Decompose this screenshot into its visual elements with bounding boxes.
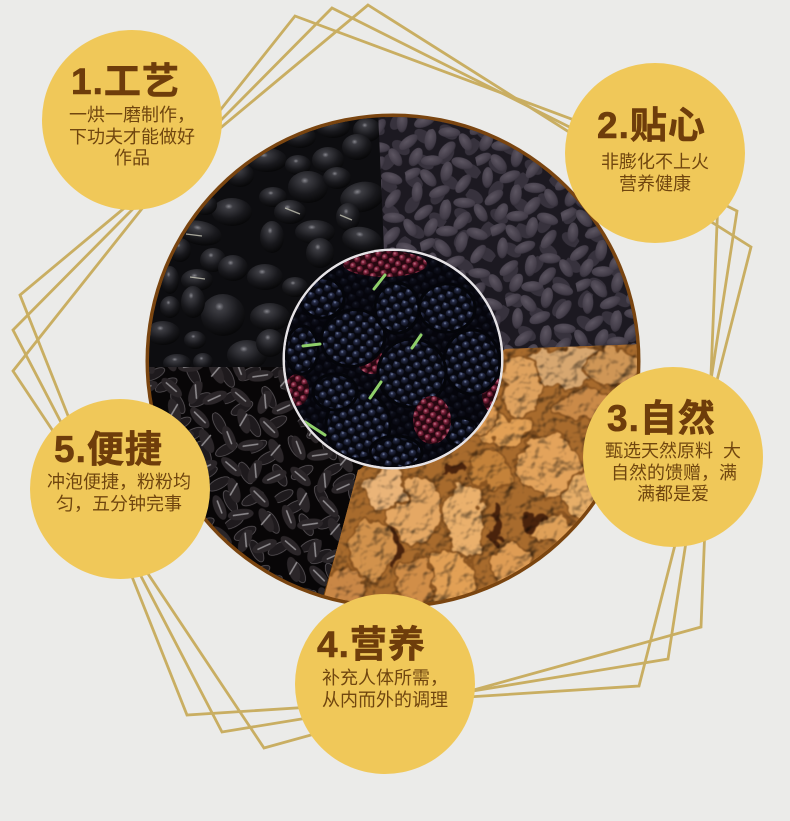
red unripe berries behind	[285, 251, 506, 413]
body text 4: 补充人体所需，	[322, 668, 448, 688]
body text 2: 非膨化不上火	[601, 152, 709, 172]
circle 1: craft	[42, 30, 222, 210]
red berry in front	[413, 396, 451, 444]
central photo circle	[145, 110, 660, 630]
body text 1: 一烘一磨制作，	[69, 105, 195, 125]
body text 5	[47, 472, 191, 514]
circle 5: convenience	[30, 399, 210, 579]
heading 4: 4.营养	[317, 624, 426, 665]
body text 3: 甄选天然原料 大	[605, 441, 741, 461]
heading 5: 5.便捷	[54, 429, 163, 470]
body text 3: 自然的馈赠，满	[611, 463, 737, 483]
body text 1: 下功夫才能做好	[69, 127, 195, 147]
heading 2: 2.贴心	[597, 105, 706, 146]
body text 2	[601, 152, 709, 194]
body text 5: 匀，五分钟完事	[56, 494, 182, 514]
body text 4	[322, 668, 448, 710]
body text 1: 作品	[114, 148, 150, 168]
heading 3: 3.自然	[607, 398, 716, 439]
body text 4: 从内而外的调理	[322, 690, 448, 710]
body text 5: 冲泡便捷，粉粉均	[47, 472, 191, 492]
circle 4: nutrition	[295, 594, 475, 774]
circle 2: care	[565, 63, 745, 243]
body text 3	[605, 441, 741, 504]
heading 1: 1.工艺	[71, 61, 180, 102]
green stems	[303, 275, 421, 435]
photo: black sesame	[378, 110, 645, 352]
circle 3: natural	[583, 367, 763, 547]
body text 1	[69, 105, 195, 168]
body text 3: 满都是爱	[637, 484, 709, 504]
photo: walnuts	[324, 344, 637, 603]
body text 2: 营养健康	[619, 174, 691, 194]
photo: black beans	[145, 110, 387, 372]
photo: mulberries (center circle)	[282, 248, 506, 470]
photo: black rice	[149, 367, 364, 595]
ripe dark berries	[286, 278, 500, 468]
walnut dark crevices	[391, 465, 543, 568]
